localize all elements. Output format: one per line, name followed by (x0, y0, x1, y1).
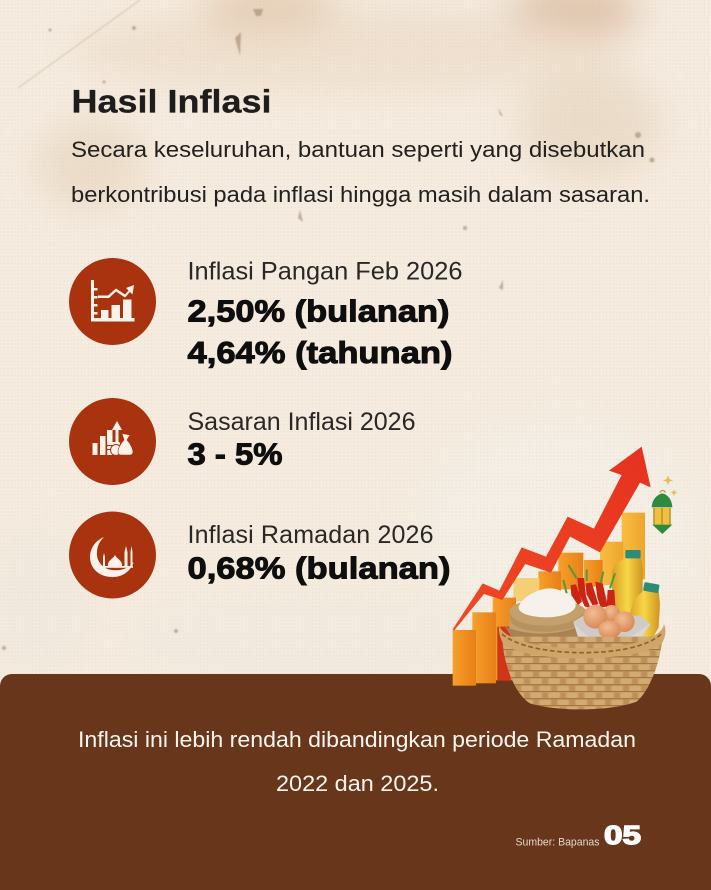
icon: coins and money bag (69, 398, 156, 485)
icon: rising chart (69, 258, 156, 345)
oil bottles (612, 550, 660, 641)
red arrow (453, 447, 651, 631)
bottom panel (0, 674, 711, 890)
rice sack (505, 588, 586, 648)
closing statement: 2022 dan 2025. (276, 771, 439, 796)
text block: Sasaran Inflasi (188, 408, 416, 472)
illustration: food basket with rising arrow (453, 447, 677, 709)
chilies (563, 565, 615, 608)
wicker basket (499, 624, 665, 709)
source note: Sumber: Bapanas (516, 836, 600, 848)
icon: crescent and mosque (69, 512, 156, 598)
text block: Sasaran Inflasi: Sasaran Inflasi 2026 (188, 408, 416, 436)
title: Hasil Inflasi (72, 84, 272, 120)
text block: Inflasi Pangan: Inflasi Pangan Feb 2026 (188, 258, 462, 286)
text block: Inflasi Pangan (188, 258, 462, 370)
text block: Sasaran Inflasi: 3 - 5% (188, 436, 282, 472)
closing statement (78, 727, 636, 796)
text block: Inflasi Ramadan: Inflasi Ramadan 2026 (188, 521, 434, 549)
text block: Inflasi Ramadan: 0,68% (bulanan) (188, 550, 450, 586)
page number: 05 (604, 820, 641, 850)
lantern (652, 475, 677, 534)
intro text (71, 137, 650, 207)
intro text: berkontribusi pada inflasi hingga masih dalam sasaran. (71, 182, 650, 207)
text block: Inflasi Ramadan (188, 521, 450, 586)
text block: Inflasi Pangan: 4,64% (tahunan) (188, 335, 452, 370)
text block: Inflasi Pangan: 2,50% (bulanan) (188, 294, 450, 328)
eggs tray (573, 605, 651, 646)
intro text: Secara keseluruhan, bantuan seperti yang disebutkan (71, 137, 645, 162)
closing statement: Inflasi ini lebih rendah dibandingkan periode Ramadan (78, 727, 636, 752)
bars (453, 513, 645, 686)
